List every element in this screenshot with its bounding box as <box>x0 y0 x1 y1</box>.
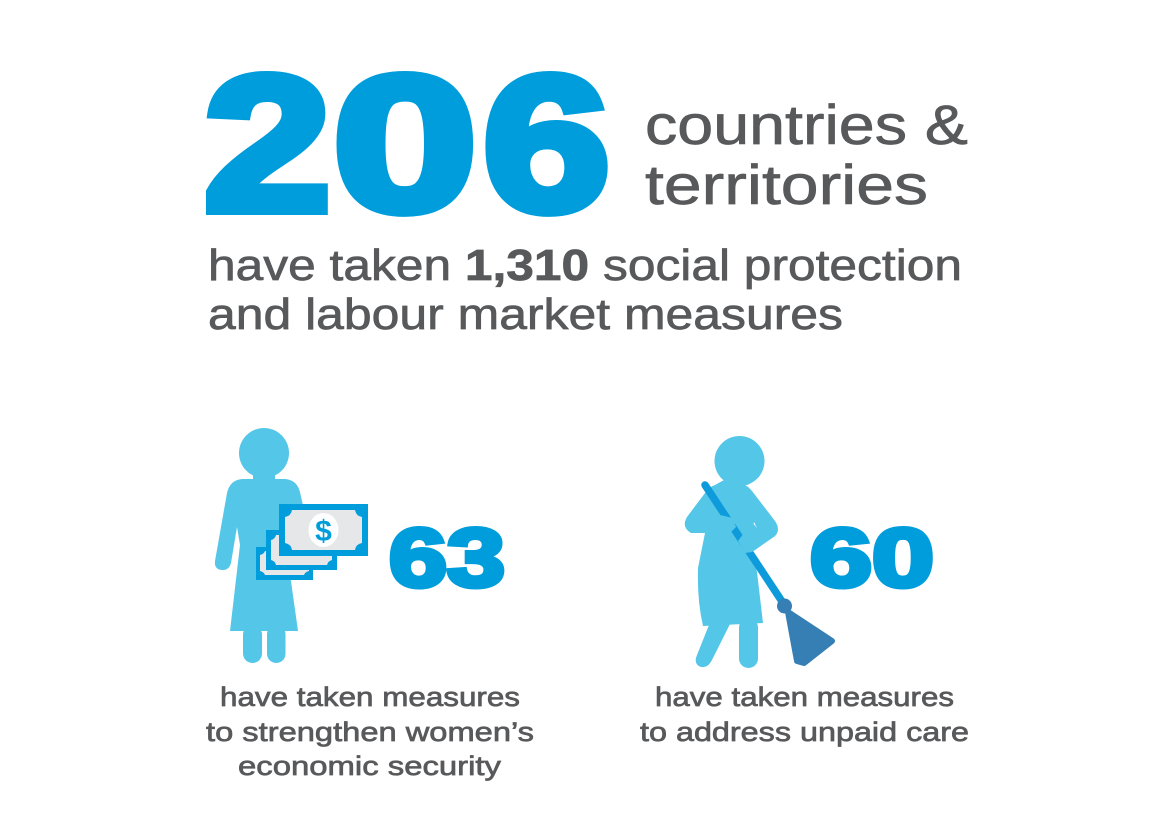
big number 206: 6 <box>483 36 610 251</box>
big number 206: 2 <box>204 36 331 251</box>
arm over handle <box>720 515 775 553</box>
money stack: $ <box>315 515 332 548</box>
caption: unpaid care <box>640 682 969 747</box>
heading: countries & territories: countries & <box>645 93 968 156</box>
caption: women's economic security: have taken measures <box>220 682 520 712</box>
big number 206: 0 <box>333 36 477 251</box>
heading: countries & territories <box>645 93 968 216</box>
number 63: 63 <box>389 511 505 604</box>
broom handle <box>705 485 785 606</box>
caption: women's economic security: to strengthen women’s <box>206 717 534 747</box>
woman figure <box>685 436 778 668</box>
broom head <box>777 598 832 663</box>
heading: countries & territories: territories <box>645 153 928 216</box>
money stack <box>256 504 368 580</box>
caption: unpaid care: have taken measures <box>655 682 954 712</box>
big number 206 <box>204 36 610 251</box>
woman figure <box>215 428 304 663</box>
subheading: social protection measures: and labour market measures <box>208 290 843 339</box>
caption: women's economic security <box>206 682 534 781</box>
caption: women's economic security: economic security <box>238 751 502 781</box>
subheading: social protection measures: have taken 1,310 social protection <box>208 241 962 290</box>
icon: woman sweeping with broom <box>685 436 832 668</box>
subheading: social protection measures <box>208 241 962 339</box>
icon: woman holding money <box>215 428 368 663</box>
number 60: 60 <box>810 511 934 604</box>
caption: unpaid care: to address unpaid care <box>640 717 969 747</box>
